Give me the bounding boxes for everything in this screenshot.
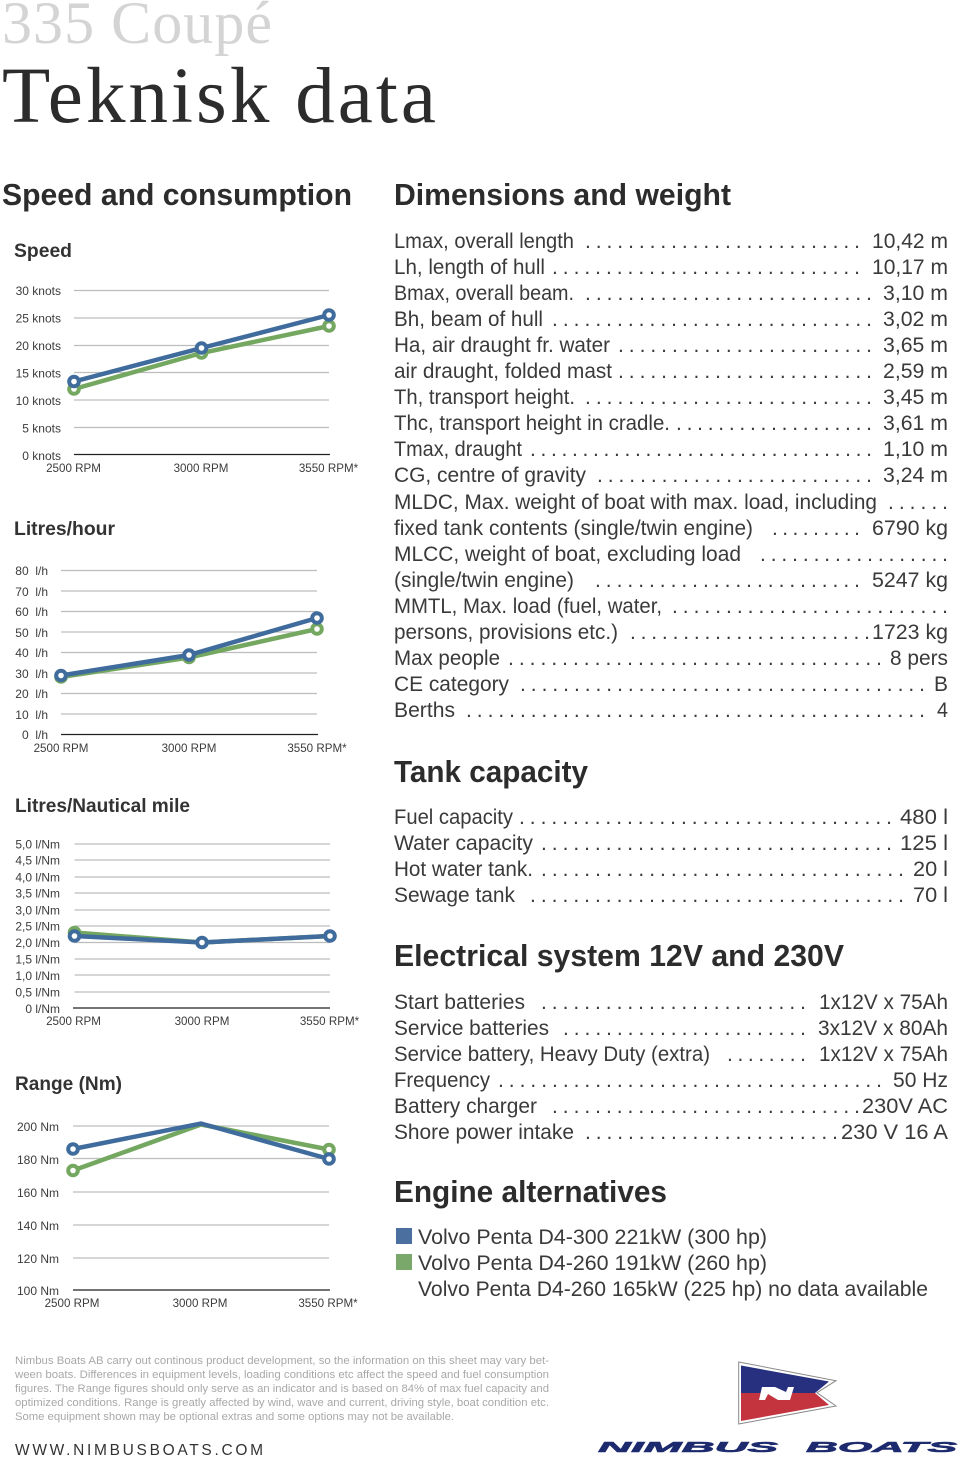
x axis labels: litres per hour: 3550 RPM*	[287, 742, 347, 755]
table: dimensions rows: 2,59 m	[883, 360, 948, 383]
table: electrical rows: 230 V 16 A	[841, 1121, 948, 1144]
x axis labels: speed: 3550 RPM*	[299, 462, 359, 475]
series: green engine litres per nautical mile	[70, 928, 330, 942]
series: green engine range	[68, 1124, 334, 1175]
table: electrical rows: 1x12V x 75Ah	[819, 1043, 948, 1066]
x axis labels: range: 3000 RPM	[173, 1297, 227, 1310]
table: tank rows: ..................................	[541, 858, 904, 881]
y axis labels: litres per nautical mile: 3,0 l/Nm	[15, 904, 60, 918]
table: electrical rows: Start batteries	[394, 991, 525, 1014]
x axis labels: litres per nautical mile: 2500 RPM	[46, 1015, 101, 1028]
disclaimer text	[14, 1355, 549, 1423]
table: dimensions rows: ......	[888, 491, 948, 514]
y axis labels: litres per nautical mile: 4,0 l/Nm	[15, 870, 60, 884]
table: dimensions rows: Thc, transport height in cradle.	[394, 412, 670, 435]
table: electrical rows: .......................	[563, 1017, 806, 1040]
table: dimensions rows: 8 pers	[890, 647, 948, 670]
table: electrical rows: Frequency	[394, 1069, 490, 1092]
table: electrical rows: 3x12V x 80Ah	[818, 1017, 948, 1040]
y axis labels: range: 200 Nm	[17, 1120, 59, 1134]
series: blue engine range	[68, 1124, 334, 1164]
table: tank rows: ...................................	[530, 884, 904, 907]
panel: electrical system	[394, 938, 948, 1144]
chart: range	[15, 1073, 358, 1310]
table: dimensions rows: ..........................	[585, 230, 860, 253]
table: electrical rows: 50 Hz	[893, 1069, 948, 1092]
panel: tank capacity	[394, 754, 948, 907]
y axis labels: range: 100 Nm	[17, 1284, 59, 1298]
table: dimensions rows: 6790 kg	[872, 517, 948, 540]
chart title: litres per nautical mile: Litres/Nautical mile	[15, 795, 190, 817]
table: dimensions rows: ..........................	[597, 464, 872, 487]
disclaimer text: ween boats. Differences in equipment levels, loading conditions etc affect the speed and fuel consumption	[14, 1369, 549, 1381]
chart title: range: Range (Nm)	[15, 1073, 122, 1095]
table: dimensions rows: Lmax, overall length	[394, 230, 574, 253]
table: dimensions rows: ..................	[760, 543, 948, 566]
table: electrical rows: ....................................	[498, 1069, 882, 1092]
table: dimensions rows: Lh, length of hull	[394, 256, 545, 279]
x axis labels: speed: 2500 RPM	[46, 462, 101, 475]
table: dimensions rows: .............................	[552, 256, 860, 279]
table: dimensions rows: .........	[772, 517, 860, 540]
chart: speed	[14, 240, 359, 475]
heading: electrical system: Electrical system 12V and 230V	[394, 938, 844, 973]
table: dimensions rows: B	[934, 673, 948, 696]
y axis labels: litres per nautical mile: 1,5 l/Nm	[15, 952, 60, 966]
table: electrical rows: ........	[727, 1043, 806, 1066]
disclaimer text: Some equipment shown may be optional extras and some options may not be available.	[15, 1411, 454, 1423]
table: dimensions rows: 5247 kg	[872, 569, 948, 592]
x axis labels: litres per nautical mile: 3550 RPM*	[300, 1015, 360, 1028]
y axis labels: litres per hour	[15, 564, 48, 742]
y axis labels: speed: 15 knots	[16, 366, 61, 380]
table: dimensions rows: .................................	[530, 438, 872, 461]
logo: Nimbus Boats wordmark: BOATS	[806, 1439, 957, 1456]
y axis labels: litres per hour: 40 l/h	[15, 646, 48, 660]
table: electrical rows: .............................	[552, 1095, 860, 1118]
logo: Nimbus pennant	[739, 1362, 836, 1424]
table: tank rows: ...................................	[519, 806, 892, 829]
table: dimensions rows: Th, transport height.	[394, 386, 575, 409]
y axis labels: speed: 30 knots	[16, 284, 61, 298]
y axis labels: speed: 10 knots	[16, 394, 61, 408]
table: dimensions rows: CE category	[394, 673, 509, 696]
disclaimer text: Nimbus Boats AB carry out continous product development, so the information on this sheet may vary bet-	[15, 1355, 549, 1367]
y axis labels: litres per hour: 50 l/h	[15, 626, 48, 640]
y axis labels: litres per nautical mile: 2,0 l/Nm	[15, 936, 60, 950]
table: dimensions rows: Berths	[394, 699, 455, 722]
table: dimensions rows: 3,02 m	[883, 308, 948, 331]
table: tank rows: Fuel capacity	[394, 806, 513, 829]
table: electrical rows: Service battery, Heavy Duty (extra)	[394, 1043, 710, 1066]
table: electrical rows: 1x12V x 75Ah	[819, 991, 948, 1014]
heading: speed and consumption: Speed and consumption	[2, 177, 352, 212]
table: dimensions rows: 3,24 m	[883, 464, 948, 487]
y axis labels: speed: 25 knots	[16, 312, 61, 326]
table: dimensions rows: ........................	[618, 360, 872, 383]
table: tank rows: 20 l	[913, 858, 948, 881]
y axis labels: speed: 0 knots	[22, 449, 61, 463]
x axis labels: litres per nautical mile	[46, 1015, 360, 1028]
logo: Nimbus Boats wordmark: NIMBUS	[598, 1439, 778, 1456]
heading: dimensions and weight: Dimensions and weight	[394, 177, 731, 212]
x axis labels: range: 2500 RPM	[45, 1297, 99, 1310]
y axis labels: range	[17, 1120, 59, 1298]
series: blue engine litres per nautical mile	[70, 931, 335, 947]
chart title: speed: Speed	[14, 240, 72, 262]
table: dimensions rows: ...................	[676, 412, 872, 435]
y axis labels: speed: 5 knots	[22, 422, 61, 436]
table: dimensions rows: ...........................	[585, 282, 872, 305]
table: dimensions rows: Max people	[394, 647, 500, 670]
y axis labels: litres per hour: 0 l/h	[22, 728, 48, 742]
x axis labels: speed: 3000 RPM	[174, 462, 228, 475]
table: tank rows: Sewage tank	[394, 884, 515, 907]
table: electrical rows: Battery charger	[394, 1095, 537, 1118]
table: dimensions rows: air draught, folded mast	[394, 360, 612, 383]
series: blue engine speed	[69, 310, 334, 386]
table: dimensions rows: ...........................................	[466, 699, 925, 722]
table: electrical rows: 230V AC	[862, 1095, 948, 1118]
table: dimensions rows	[394, 230, 948, 722]
table: electrical rows: ........................	[585, 1121, 838, 1144]
table: dimensions rows: MLCC, weight of boat, excluding load	[394, 543, 741, 566]
y axis labels: litres per nautical mile: 0 l/Nm	[25, 1002, 60, 1016]
table: tank rows: 125 l	[900, 832, 948, 855]
table: dimensions rows: ..........................	[672, 595, 948, 618]
y axis labels: litres per hour: 70 l/h	[15, 585, 48, 599]
legend: blue engine: Volvo Penta D4-300 221kW (300 hp)	[418, 1226, 767, 1249]
y axis labels: litres per nautical mile	[15, 838, 60, 1016]
table: dimensions rows: 1723 kg	[872, 621, 948, 644]
series: green engine speed	[69, 321, 334, 394]
y axis labels: litres per hour: 30 l/h	[15, 667, 48, 681]
y axis labels: litres per nautical mile: 3,5 l/Nm	[15, 886, 60, 900]
y axis labels: litres per nautical mile: 4,5 l/Nm	[15, 854, 60, 868]
x axis labels: litres per nautical mile: 3000 RPM	[175, 1015, 229, 1028]
y axis labels: litres per nautical mile: 1,0 l/Nm	[15, 969, 60, 983]
panel: engine alternatives	[394, 1174, 928, 1301]
table: dimensions rows: MMTL, Max. load (fuel, water,	[394, 595, 662, 618]
series: blue engine litres per hour	[56, 613, 322, 680]
table: dimensions rows: ........................	[618, 334, 872, 357]
y axis labels: litres per nautical mile: 2,5 l/Nm	[15, 920, 60, 934]
table: tank rows: 480 l	[900, 806, 948, 829]
y axis labels: range: 160 Nm	[17, 1186, 59, 1200]
table: tank rows: Water capacity	[394, 832, 533, 855]
table: electrical rows: Shore power intake	[394, 1121, 574, 1144]
table: dimensions rows: MLDC, Max. weight of boat with max. load, including	[394, 491, 877, 514]
y axis labels: speed: 20 knots	[16, 339, 61, 353]
table: dimensions rows: CG, centre of gravity	[394, 464, 586, 487]
table: dimensions rows: Ha, air draught fr. water	[394, 334, 610, 357]
series: green engine litres per hour	[56, 624, 322, 682]
table: tank rows: Hot water tank.	[394, 858, 533, 881]
table: dimensions rows: 1,10 m	[883, 438, 948, 461]
panel: dimensions and weight	[394, 177, 948, 722]
table: electrical rows	[394, 991, 948, 1144]
panel: speed and consumption	[2, 177, 360, 1310]
heading: engine alternatives: Engine alternatives	[394, 1174, 667, 1209]
logo: Nimbus Boats wordmark	[598, 1439, 957, 1456]
y axis labels: litres per hour: 10 l/h	[15, 708, 48, 722]
legend: engine without data: Volvo Penta D4-260 165kW (225 hp) no data available	[418, 1278, 928, 1301]
table: dimensions rows: 3,65 m	[883, 334, 948, 357]
table: dimensions rows: Tmax, draught	[394, 438, 522, 461]
table: dimensions rows: ...................................	[508, 647, 882, 670]
y axis labels: litres per nautical mile: 5,0 l/Nm	[15, 838, 60, 852]
y axis labels: litres per hour: 80 l/h	[15, 564, 48, 578]
table: dimensions rows: 3,10 m	[883, 282, 948, 305]
table: dimensions rows: 10,17 m	[872, 256, 948, 279]
table: electrical rows: .........................	[541, 991, 806, 1014]
disclaimer text: optimized conditions. Range is greatly affected by wind, wave and current, driving style, boat condition etc.	[15, 1397, 549, 1409]
table: dimensions rows: persons, provisions etc.)	[394, 621, 618, 644]
table: dimensions rows: Bmax, overall beam.	[394, 282, 574, 305]
table: dimensions rows: .......................	[630, 621, 870, 644]
x axis labels: litres per hour: 3000 RPM	[162, 742, 216, 755]
table: tank rows: .................................	[541, 832, 892, 855]
title: Teknisk data: Teknisk data	[2, 53, 436, 140]
table: dimensions rows: ...........................	[585, 386, 872, 409]
table: dimensions rows: ..............................	[552, 308, 872, 331]
table: dimensions rows: 10,42 m	[872, 230, 948, 253]
x axis labels: litres per hour: 2500 RPM	[34, 742, 88, 755]
chart: litres per nautical mile	[15, 795, 360, 1028]
y axis labels: litres per nautical mile: 0,5 l/Nm	[15, 986, 60, 1000]
chart title: litres per hour: Litres/hour	[14, 518, 115, 540]
heading: tank capacity: Tank capacity	[394, 754, 589, 789]
chart: litres per hour	[14, 518, 347, 755]
table: dimensions rows: 3,45 m	[883, 386, 948, 409]
table: dimensions rows: Bh, beam of hull	[394, 308, 543, 331]
y axis labels: litres per hour: 20 l/h	[15, 687, 48, 701]
y axis labels: litres per hour: 60 l/h	[15, 605, 48, 619]
table: dimensions rows: fixed tank contents (single/twin engine)	[394, 517, 753, 540]
table: dimensions rows: ......................................	[520, 673, 925, 696]
table: dimensions rows: 3,61 m	[883, 412, 948, 435]
table: dimensions rows: 4	[937, 699, 948, 722]
table: electrical rows: Service batteries	[394, 1017, 549, 1040]
table: dimensions rows: .........................	[595, 569, 860, 592]
x axis labels: litres per hour	[34, 742, 347, 755]
x axis labels: speed	[46, 462, 359, 475]
y axis labels: range: 180 Nm	[17, 1153, 59, 1167]
x axis labels: range: 3550 RPM*	[298, 1297, 358, 1310]
disclaimer text: figures. The Range figures should only serve as an indicator and is based on 84% of max fuel capacity and	[15, 1383, 549, 1395]
y axis labels: range: 140 Nm	[17, 1219, 59, 1233]
table: dimensions rows: (single/twin engine)	[394, 569, 574, 592]
legend: green engine: Volvo Penta D4-260 191kW (260 hp)	[418, 1252, 767, 1275]
x axis labels: range	[45, 1297, 358, 1310]
table: tank rows: 70 l	[913, 884, 948, 907]
y axis labels: range: 120 Nm	[17, 1252, 59, 1266]
table: tank rows	[394, 806, 948, 907]
y axis labels: speed	[16, 284, 61, 463]
